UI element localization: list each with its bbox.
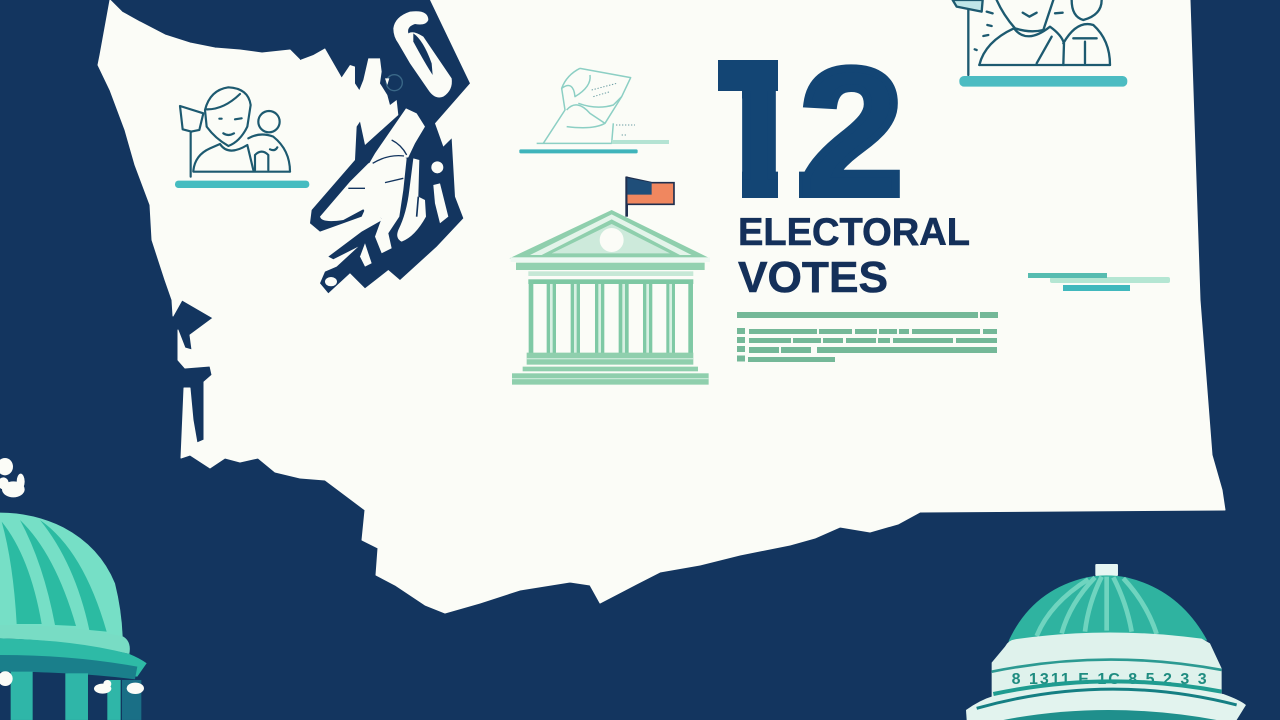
icon: voter figures, left [175,87,309,188]
confetti dots [975,12,993,50]
headline number: 12 [703,31,903,232]
dark ring line [977,689,1237,708]
map silhouette [98,0,1225,613]
cornice [0,638,147,677]
panel: Washington state map [98,0,1225,613]
inscription: 8 1311 E 1C 8 5 2 3 3 [1012,671,1207,688]
stylobate steps [512,353,709,385]
cloud puffs bottom [0,671,144,694]
icon underline [959,76,1127,87]
underline [519,149,638,153]
lower band [1003,710,1217,720]
light shelf [612,140,669,144]
flag [953,0,983,12]
long islet [433,183,448,223]
top island inner channel [413,33,433,75]
right inlet [397,158,426,242]
small note marks [592,83,635,135]
text placeholder lines [737,315,998,360]
heading: electoral votes [738,211,970,302]
dome [0,513,123,637]
dome ribs [1037,577,1157,636]
top island [393,11,452,97]
illustration: right capitol dome [966,564,1246,720]
lower ring [966,687,1246,720]
Puget Sound water and islands [300,0,470,293]
dome rim [0,625,130,654]
inlet channel [417,197,418,217]
flag [625,177,674,217]
ring islet [385,78,389,85]
middle island [368,108,425,165]
band base [993,681,1222,694]
icon underline [175,181,309,188]
sound water [300,0,470,293]
pediment [509,210,710,262]
heading: electoral votes: ELECTORAL [738,211,970,254]
columns [529,280,693,353]
dome [1008,575,1207,642]
inlet lines [348,140,407,188]
tip islet [325,277,337,286]
lower islet [360,243,372,267]
icon: voter figures, top right [953,0,1127,87]
entablature [516,263,705,270]
illustration: left capitol dome [0,458,147,720]
inscription band line [992,660,1222,672]
column highlights [550,284,672,353]
teal accent lines [1028,273,1170,291]
icon: ballot hand sketch [519,68,669,153]
round islet [431,161,443,173]
heading: electoral votes: VOTES [738,253,888,302]
cloud puffs top [0,458,25,497]
peninsula [320,157,407,253]
dome ribs [2,520,107,632]
lantern [1095,564,1118,576]
columns [11,672,121,720]
drum [992,632,1222,697]
icon: green capitol with flag [509,177,710,385]
small ring [386,75,402,91]
